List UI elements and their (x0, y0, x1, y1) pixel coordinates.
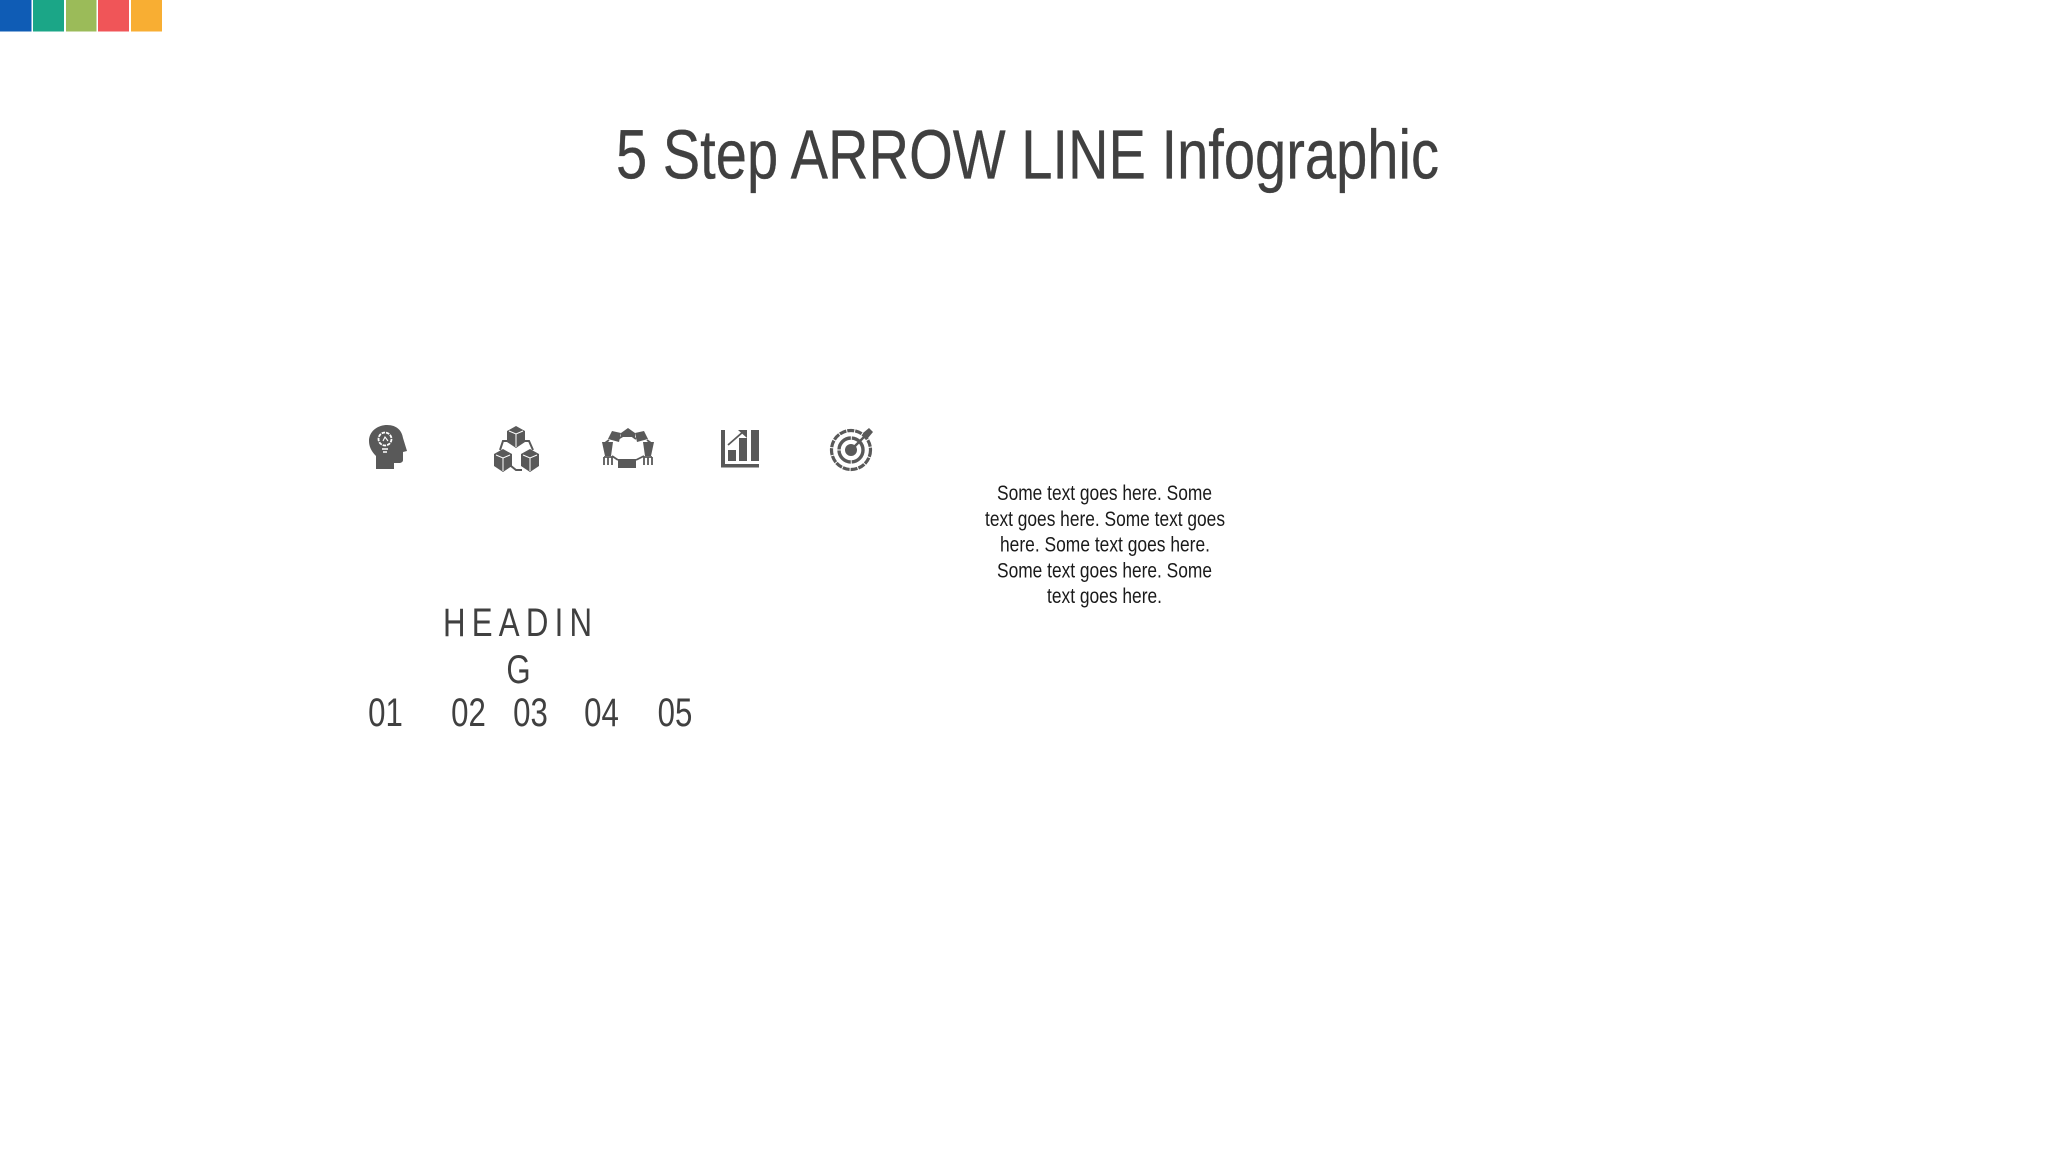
title: 5 Step ARROW LINE Infographic (616, 116, 1439, 194)
body text (985, 481, 1225, 608)
step numbers: 05 (658, 690, 692, 735)
step numbers (368, 690, 692, 735)
heading (443, 600, 598, 692)
icon: team around a table (602, 428, 654, 468)
icon: bar chart with arrow (721, 430, 759, 468)
icon: target with arrow (832, 428, 873, 470)
icon: head with light bulb (369, 425, 407, 469)
step numbers: 03 (513, 690, 548, 735)
colour swatches (0, 0, 162, 32)
body text: Some text goes here. Some (997, 481, 1212, 505)
body text: here. Some text goes here. (1000, 532, 1210, 556)
icon: connected cubes (494, 426, 539, 472)
body text: text goes here. Some text goes (985, 507, 1225, 531)
heading: G (506, 647, 531, 692)
step numbers: 04 (584, 690, 619, 735)
heading: HEADIN (443, 600, 598, 645)
body text: text goes here. (1047, 584, 1162, 608)
body text: Some text goes here. Some (997, 558, 1212, 582)
step numbers: 02 (451, 690, 486, 735)
step numbers: 01 (368, 690, 403, 735)
